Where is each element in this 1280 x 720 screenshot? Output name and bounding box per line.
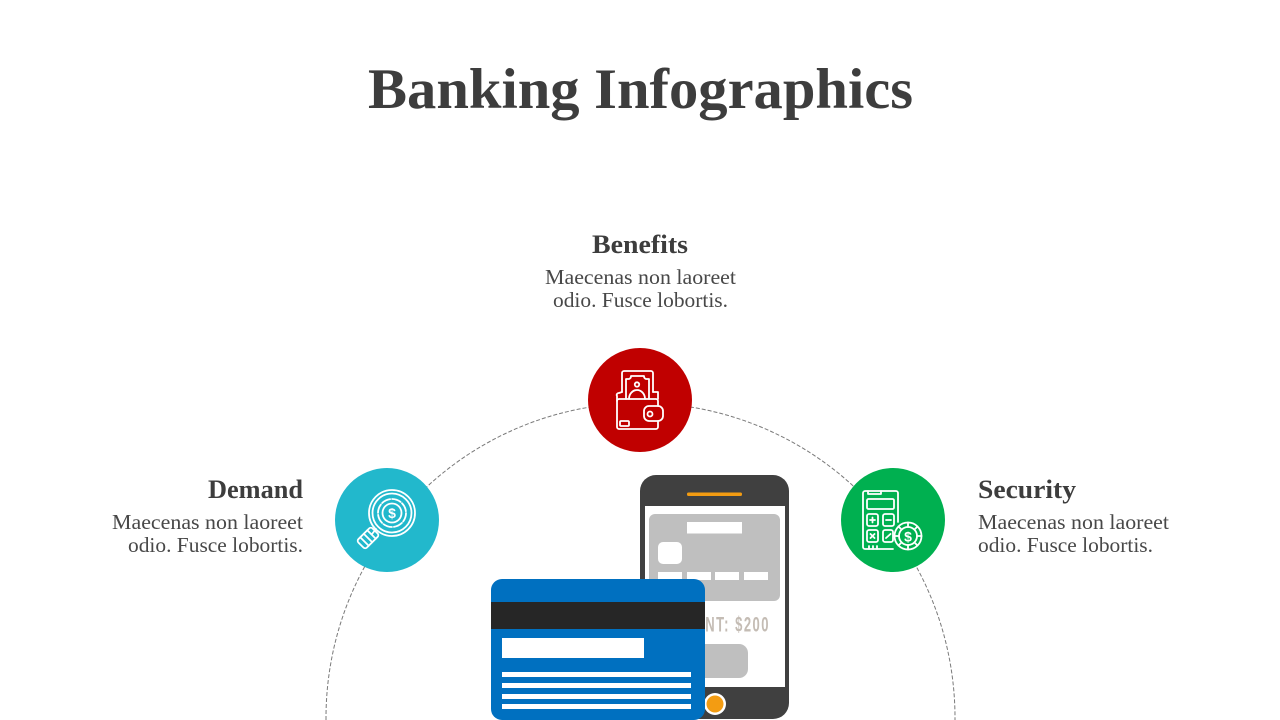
icon: calculator with coin on green circle [841,468,945,572]
text block: benefits: Benefits [592,230,688,259]
title: Banking Infographics [368,58,913,121]
text block: demand: Maecenas non laoreet [112,510,303,534]
icon: calculator with coin on green circle: $ [904,528,912,544]
text block: demand: odio. Fusce lobortis. [128,533,303,557]
text block: security: Security [978,475,1076,504]
illustration: smartphone: PAYMENT: $200 [654,612,770,636]
icon: wallet with cash on red circle [588,348,692,452]
text block: benefits: Maecenas non laoreet [545,265,736,289]
text block: security [978,475,1169,557]
dashed arc [326,403,955,720]
icon: magnifier with coin on teal circle: $ [388,505,396,521]
illustration: smartphone [640,475,789,719]
icon: magnifier with coin on teal circle [335,468,439,572]
illustration: bank card [491,579,705,720]
text block: demand [112,475,304,557]
text block: demand: Demand [208,475,304,504]
text block: benefits [545,230,736,312]
text block: benefits: odio. Fusce lobortis. [553,288,728,312]
text block: security: odio. Fusce lobortis. [978,533,1153,557]
text block: security: Maecenas non laoreet [978,510,1169,534]
